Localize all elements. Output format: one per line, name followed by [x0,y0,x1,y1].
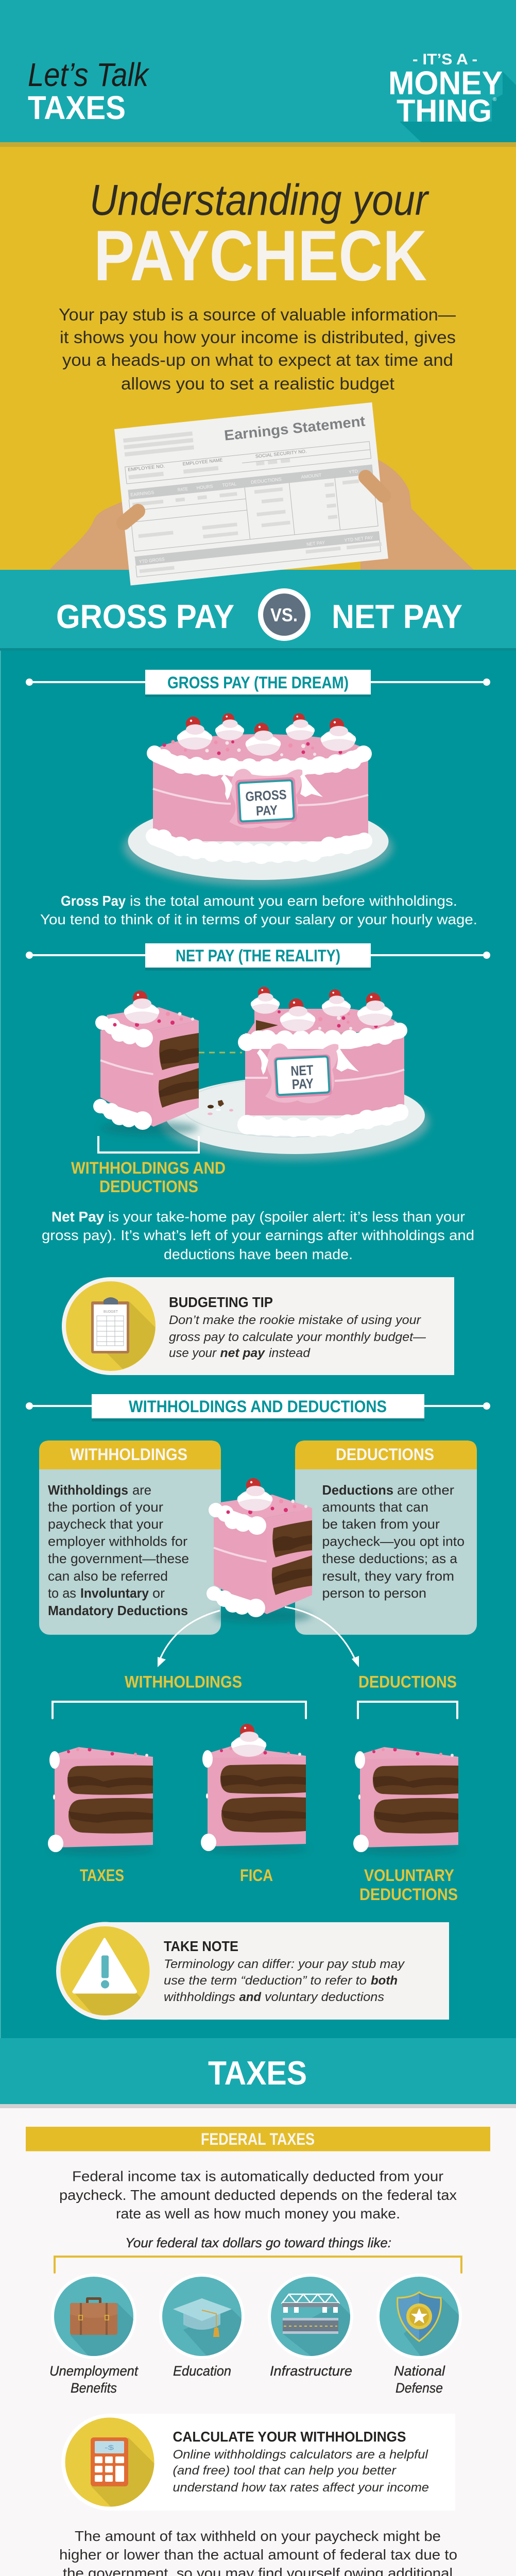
series title [28,56,150,126]
label: deductions: DEDUCTIONS [358,1672,457,1691]
heading band: taxes: TAXES [208,2054,307,2092]
callout: calculate your withholdings: understand how tax rates affect your income [173,2481,429,2495]
text: gross pay definition: is the total amount you earn before withholdings. [130,893,457,909]
slice: taxes [48,1747,154,1855]
section label: withholdings and deductions: WITHHOLDINGS AND DEDUCTIONS [129,1397,387,1416]
icon: earnings statement document: NET PAY [306,540,325,547]
label: taxes: TAXES [80,1866,124,1885]
labels: federal items: Defense [395,2380,443,2396]
callout: budgeting tip [62,1277,454,1378]
callout: take note: voluntary deductions [265,1990,384,2004]
sprinkles [163,740,362,756]
dashed cut line [199,1052,242,1053]
icon: warning triangle [61,1926,149,2015]
heading band: taxes [0,2038,516,2108]
callout: budgeting tip: Don’t make the rookie mistake of using your [169,1313,421,1327]
heading band: gross pay vs net pay [0,570,516,651]
icon: earnings statement document: DEDUCTIONS [251,477,282,485]
section label: net pay: NET PAY (THE REALITY) [176,946,340,965]
panel: deductions card [295,1440,477,1635]
gross pay tag: PAY [255,802,278,819]
icon: earnings statement document: TOTAL [222,481,237,488]
panel: deductions card: DEDUCTIONS [336,1445,434,1464]
icon: arms behind pay stub [49,453,474,570]
icon: vs badge [258,588,311,641]
icon: budget clipboard [66,1281,156,1371]
callout: take note: withholdings [164,1990,235,2004]
bracket: slice [98,1136,199,1153]
text: federal tax dollars lead-in: Your federal tax dollars go toward things like: [125,2235,391,2250]
frosting [146,745,372,864]
icon: earnings statement document: HOURS [196,484,213,490]
icon: thumbs over document [124,477,384,523]
text: gross pay definition [40,893,477,927]
panel: withholdings card: are [132,1482,151,1498]
icon: earnings statement document: EMPLOYEE NO. [128,463,165,472]
text: net pay definition: Net Pay [51,1209,104,1225]
text: federal income tax: rate as well as how much money you make. [116,2206,400,2222]
callout: budgeting tip: use your [169,1346,217,1360]
labels: federal items: Education [173,2363,231,2379]
icon: unemployment benefits briefcase [54,2277,133,2356]
slice: fica [201,1724,307,1854]
panel: deductions card: paycheck—you opt into [322,1533,465,1549]
panel: deductions card: be taken from your [322,1516,440,1532]
callout: calculate your withholdings [65,2417,428,2507]
panel: withholdings card: Withholdings [48,1482,128,1498]
callout: take note: both [371,1974,398,1988]
bracket: deductions [358,1702,457,1718]
intro paragraph: allows you to set a realistic budget [121,374,394,393]
panel: withholdings card [39,1440,221,1635]
icon: earnings statement document: EARNINGS [130,490,154,497]
slice of cake between cards [207,1478,312,1623]
heading band: gross pay vs net pay: NET PAY [332,598,462,635]
panel: deductions card: amounts that can [322,1499,428,1515]
callout: take note [56,1922,449,2023]
panel: withholdings card: WITHHOLDINGS [70,1445,187,1464]
icon: calculator: -$ [105,2444,114,2451]
panel: withholdings card: to as [48,1585,76,1601]
text: amount withheld: higher or lower than the actual amount of federal tax due to [59,2547,457,2563]
sprinkles [278,1010,397,1030]
text: net pay definition [42,1209,474,1262]
bracket: federal items [55,2257,461,2273]
gross pay tag [235,777,297,825]
labels: federal items: Benefits [71,2380,117,2396]
label: withholdings and deductions: WITHHOLDINGS AND [71,1159,226,1177]
bracket: withholdings [53,1702,306,1718]
panel: withholdings card: the government—these [48,1551,189,1566]
panel: withholdings card: Involuntary [80,1585,149,1601]
subheading: federal taxes [26,2127,490,2151]
panel: deductions card: result, they vary from [322,1568,454,1584]
slice: voluntary deductions [353,1747,460,1855]
intro paragraph [59,305,456,393]
labels: federal items [49,2363,445,2396]
callout: budgeting tip: instead [269,1346,311,1360]
callout: take note: TAKE NOTE [164,1938,238,1954]
icon: earnings statement document: Earnings Statement [223,413,366,444]
net pay tag [273,1054,332,1098]
callout: budgeting tip: net pay [220,1346,266,1360]
heading band: gross pay vs net pay: GROSS PAY [56,598,234,635]
frosting [237,1023,408,1137]
callout: calculate your withholdings: Online withholdings calculators are a helpful [173,2448,428,2462]
text: net pay definition: gross pay). It’s what’s left of your earnings after withholdings and [42,1227,474,1243]
intro paragraph: Your pay stub is a source of valuable information— [59,305,456,324]
section label: withholdings and deductions [26,1394,490,1421]
callout: calculate your withholdings: CALCULATE YOUR WITHHOLDINGS [173,2429,406,2445]
icon: earnings statement document: YTD GROSS [139,556,165,564]
icon: vs badge: VS. [270,604,298,625]
title: PAYCHECK [94,216,427,296]
icon: earnings statement document: EMPLOYEE NAME [182,457,223,467]
callout: calculate your withholdings: (and free) tool that can help you better [173,2464,397,2478]
title [90,176,429,296]
logo: It's a Money Thing: ® [493,97,497,103]
net pay tag: NET [290,1062,314,1079]
series title: Let’s Talk [28,56,150,93]
icon: earnings statement document: RATE [177,486,188,493]
labels: federal items: National [394,2363,445,2379]
cream and cherries [177,713,356,756]
icon: earnings statement document: AMOUNT [301,472,322,480]
label: withholdings and deductions [71,1159,226,1196]
arrow: to withholdings [158,1611,220,1667]
text: amount withheld [59,2528,457,2576]
icon: earnings statement document [114,402,388,585]
logo: It's a Money Thing: MONEY [388,64,503,101]
text: federal income tax [59,2168,457,2222]
illustration: cut cake with slice removed [93,987,429,1161]
panel: withholdings card: or [152,1585,165,1601]
text: gross pay definition: You tend to think of it in terms of your salary or your hourly wage. [40,911,477,927]
subheading: federal taxes: FEDERAL TAXES [201,2130,315,2148]
label: voluntary deductions: VOLUNTARY [364,1866,454,1885]
slice of cake [93,991,199,1136]
icon: calculator [65,2417,154,2507]
text: amount withheld: The amount of tax withheld on your paycheck might be [75,2528,441,2544]
callout: take note: use the term “deduction” to refer to [164,1974,367,1988]
section label: net pay [26,943,490,971]
section label: gross pay [26,670,490,697]
icon: earnings statement document: YTD [349,468,358,474]
label: fica: FICA [240,1866,273,1885]
series title: TAXES [28,89,126,126]
callout: budgeting tip: BUDGETING TIP [169,1294,273,1310]
panel: deductions card: these deductions; as a [322,1551,458,1566]
panel: withholdings card: Mandatory Deductions [48,1603,188,1618]
title: Understanding your [90,176,429,224]
label: voluntary deductions: DEDUCTIONS [359,1885,458,1904]
labels: federal items: Unemployment [49,2363,139,2379]
label: withholdings and deductions: DEDUCTIONS [99,1177,198,1196]
panel: withholdings card: the portion of your [48,1499,163,1515]
labels: federal items: Infrastructure [270,2363,352,2379]
panel: deductions card: are other [397,1482,454,1498]
text: net pay definition: deductions have been made. [164,1246,353,1262]
text: gross pay definition: Gross Pay [61,893,126,909]
text: federal income tax: Federal income tax is automatically deducted from your [72,2168,443,2184]
crumbs [208,1100,233,1115]
icon: earnings statement document: SOCIAL SECURITY NO. [255,449,307,459]
label: voluntary deductions [359,1866,458,1904]
text: net pay definition: is your take-home pay (spoiler alert: it’s less than your [108,1209,465,1225]
logo: It's a Money Thing: - IT’S A - [412,51,477,68]
panel: deductions card: person to person [322,1585,426,1601]
panel: deductions card: Deductions [322,1482,393,1498]
panel: withholdings card: can also be referred [48,1568,168,1584]
callout: take note: and [239,1990,262,2004]
icon: earnings statement document: YTD NET PAY [344,535,373,543]
cream and cherries [251,987,392,1031]
illustration: whole cake labelled gross pay [123,713,393,886]
intro paragraph: it shows you how your income is distributed, gives [60,328,456,347]
intro paragraph: you a heads-up on what to expect at tax time and [62,350,453,369]
text: federal income tax: paycheck. The amount deducted depends on the federal tax [59,2187,457,2203]
icon: infrastructure bridge [271,2277,350,2356]
icon: budget clipboard: BUDGET [104,1310,118,1314]
header band [0,0,516,147]
arrow: to deductions [285,1607,359,1667]
logo: It's a Money Thing: THING [397,93,492,128]
label: withholdings: WITHHOLDINGS [125,1672,242,1691]
net pay tag: PAY [291,1076,314,1092]
logo: It's a Money Thing [388,51,516,142]
panel: withholdings card: paycheck that your [48,1516,163,1532]
icon: education cap [162,2277,242,2356]
callout: budgeting tip: gross pay to calculate your monthly budget— [169,1330,426,1344]
callout: take note: Terminology can differ: your pay stub may [164,1957,405,1971]
panel: title on yellow [0,147,516,570]
icon: national defense shield [380,2277,459,2356]
panel: withholdings card: employer withholds for [48,1533,187,1549]
panel: gross vs net dark teal section [0,651,516,2038]
section label: gross pay: GROSS PAY (THE DREAM) [167,673,349,692]
panel: light background [0,2108,516,2576]
gross pay tag: GROSS [245,787,287,804]
